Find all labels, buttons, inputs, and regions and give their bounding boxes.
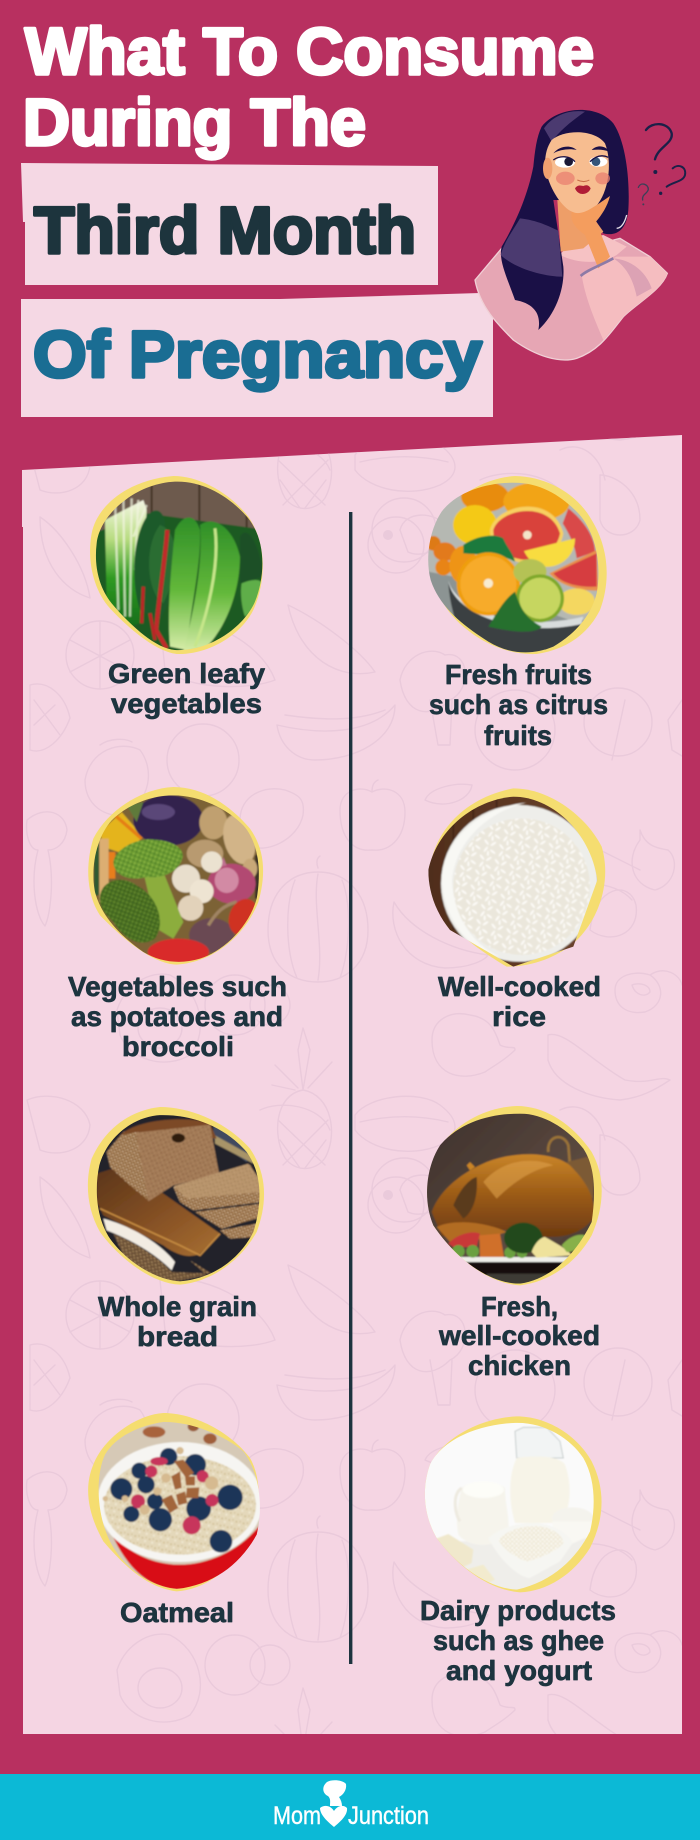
label: chicken [468,1350,571,1381]
label [429,659,608,751]
photo: bread loaf [88,1107,264,1285]
label: as potatoes and [71,1001,283,1032]
label: Fresh, [481,1291,558,1322]
wordmark [273,1802,429,1830]
photo: oatmeal bowl [88,1413,260,1592]
label: Dairy products [420,1595,616,1626]
item: well-cooked rice [420,787,607,1032]
item: dairy products [420,1408,616,1686]
footer band [0,1774,700,1840]
label: such as ghee [433,1625,604,1656]
item: fresh fruits [420,470,610,751]
label [108,658,265,719]
item: oatmeal [88,1413,260,1623]
label: and yogurt [446,1655,592,1686]
label: well-cooked [438,1320,600,1351]
photo: bowl of rice [420,787,607,973]
label: Vegetables such [68,971,287,1002]
heading box: Third Month: Third Month [34,193,416,267]
label: fruits [484,720,552,751]
heading box: Third Month [21,163,438,285]
heading box: Of Pregnancy [21,293,493,417]
item: fresh well-cooked chicken [427,1106,602,1376]
heading box: Of Pregnancy: Of Pregnancy [33,317,482,391]
label: vegetables [111,688,262,719]
label: Well-cooked [438,971,601,1002]
photo: dairy products [424,1416,602,1592]
label: Fresh fruits [445,659,592,690]
illustration: thinking woman [475,110,685,360]
logo: MomJunction [273,1780,429,1830]
title line: What To Consume During The: During The [23,85,366,159]
label: broccoli [122,1031,234,1062]
icon: mother and baby heart [320,1780,347,1827]
photo: roast chicken [427,1106,602,1286]
title line: What To Consume During The [23,14,594,159]
icon: question marks [638,124,685,205]
label [98,1291,257,1352]
item: green leafy vegetables [80,470,270,719]
photo: mixed vegetables [88,787,264,965]
item: whole grain bread [88,1107,264,1347]
panel: food list background [22,435,682,1734]
wordmark: Junction [348,1802,429,1830]
divider line [349,512,352,1664]
label [420,1595,616,1686]
wordmark: Mom [273,1802,321,1830]
label [68,971,287,1062]
label: Whole grain [98,1291,257,1322]
label: rice [492,1001,546,1032]
label: such as citrus [429,689,608,720]
label: Oatmeal [120,1597,234,1628]
label: bread [137,1321,218,1352]
label [438,971,601,1032]
photo: citrus fruits [428,476,607,654]
label: Green leafy [108,658,265,689]
photo: leafy greens [90,476,263,654]
label [438,1291,600,1381]
title line: What To Consume During The: What To Consume [25,14,594,88]
item: vegetables such as potatoes and broccoli [68,782,287,1062]
